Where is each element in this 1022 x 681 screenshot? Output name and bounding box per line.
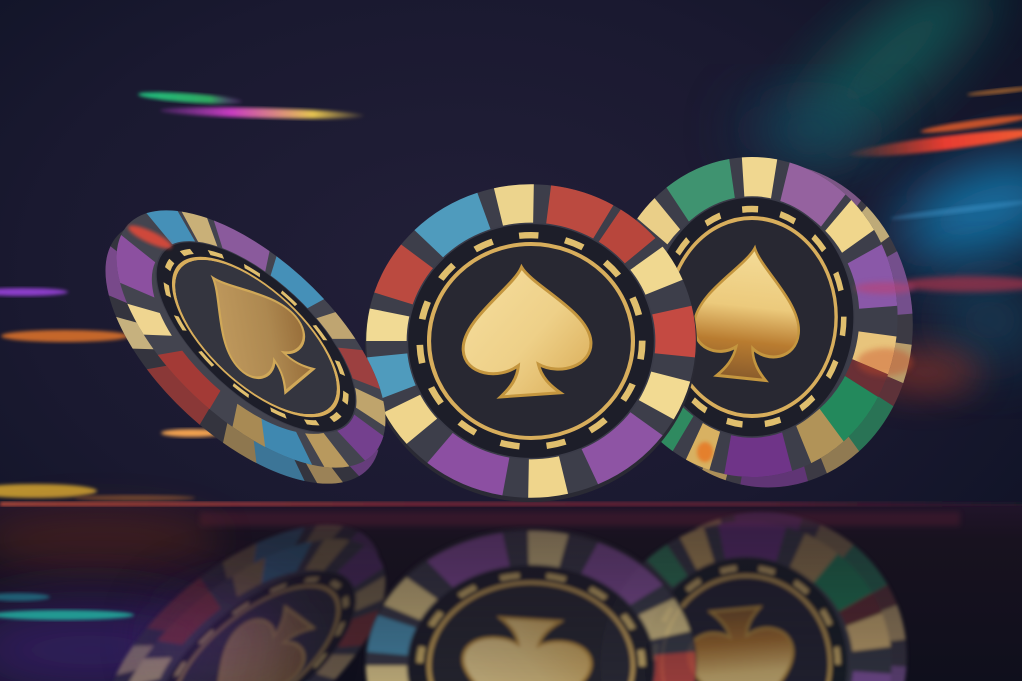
light streaks: [0, 85, 1022, 501]
background glows on the right: [740, 0, 1022, 392]
reflective floor: [0, 502, 1022, 681]
chip: left, tilted, spade: [20, 127, 468, 569]
chip: center, spade: [329, 148, 733, 534]
floor streaks: [0, 593, 134, 620]
chip: right, spade: [573, 121, 946, 524]
floor reflection of chips: [114, 512, 908, 681]
light flares across right chip: [697, 282, 915, 462]
lens flare on left chip: [126, 221, 174, 253]
